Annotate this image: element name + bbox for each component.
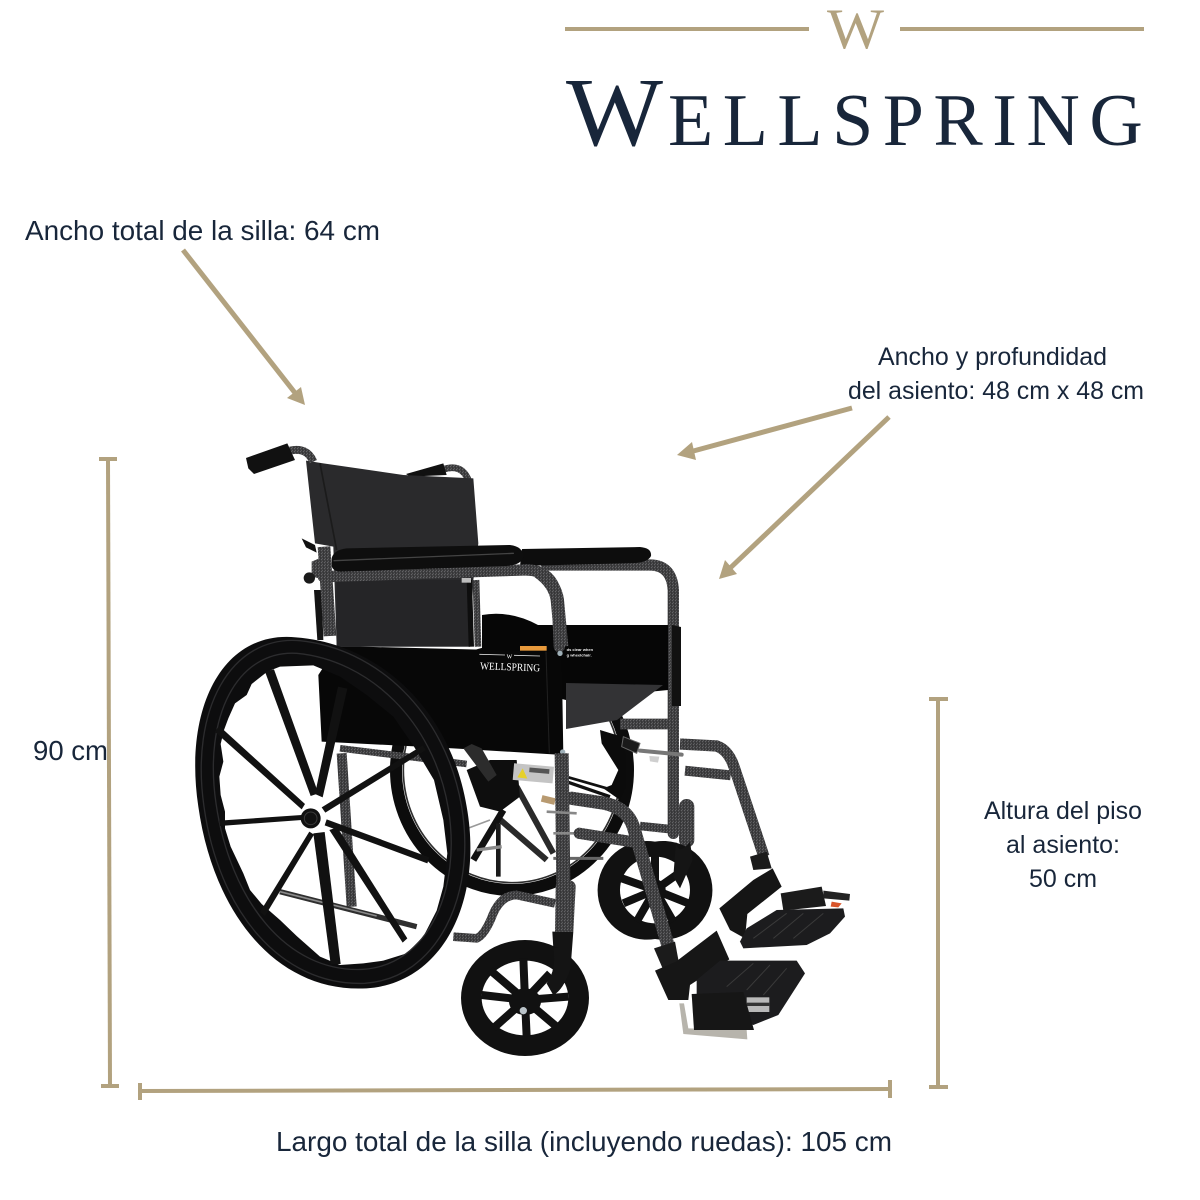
dimension bar: altura total: [99, 459, 119, 1086]
arrow: profundidad del asiento: [719, 417, 889, 579]
arrow: ancho del asiento: [677, 408, 852, 460]
logo: wordmark: [566, 59, 1152, 167]
rear wheel spokes: [215, 669, 429, 964]
warning text: [567, 647, 594, 658]
label: altura del piso: al asiento:: [1006, 831, 1120, 859]
logo: wordmark: ELLSPRING: [668, 80, 1152, 162]
label: altura del piso: [984, 797, 1142, 893]
near back post and armrest: [302, 538, 559, 647]
far footrest: [680, 744, 850, 948]
panel logo rules: [479, 654, 540, 656]
seat: [566, 683, 663, 729]
far side frame: [547, 565, 687, 840]
near footrest: [654, 931, 805, 1039]
backrest: [306, 461, 478, 647]
far caster wheel: [598, 841, 712, 940]
label: asiento: Ancho y profundidad: [878, 343, 1107, 371]
logo: Wellspring: [565, 0, 1152, 167]
label: largo total: Largo total de la silla (incluyendo ruedas): 105 cm: [276, 1126, 892, 1157]
rear wheel hub: [301, 808, 321, 828]
logo: rule right: [900, 27, 1144, 31]
label: asiento: del asiento: 48 cm x 48 cm: [848, 377, 1144, 405]
dimension bar: largo total: [140, 1080, 890, 1100]
panel logo monogram: W: [507, 654, 513, 660]
far push handle: [406, 463, 468, 480]
rear wheel rim highlights: [201, 640, 465, 983]
rear wheel ring: [195, 637, 470, 989]
logo: wordmark: W: [566, 59, 664, 167]
logo: rule left: [565, 27, 809, 31]
brake lever and warning cylinder: [463, 744, 554, 783]
far armrest: [520, 547, 651, 566]
near rear wheel: [195, 637, 470, 989]
label: altura del piso: Altura del piso: [984, 797, 1142, 825]
near side panel with brand: [318, 646, 594, 755]
warning text: ds clear when: [567, 647, 594, 652]
warning text: g wheelchair.: [567, 653, 592, 658]
near legrest tubes: [572, 798, 668, 947]
panel logo wordmark: WELLSPRING: [480, 661, 540, 674]
label: altura del piso: 50 cm: [1029, 865, 1097, 893]
label: 90 cm: 90 cm: [33, 735, 108, 766]
label: ancho total: Ancho total de la silla: 64 cm: [25, 215, 380, 246]
near push handle: [246, 443, 313, 474]
under-seat frame and cross braces: [280, 748, 610, 938]
near front post and legrest: [538, 572, 577, 883]
dimension bar: altura del asiento: [929, 699, 948, 1087]
far side panel: [482, 614, 681, 706]
warning sticker on far panel: [520, 646, 547, 651]
near caster barrel and fork: [547, 880, 576, 995]
far rear wheel: [396, 650, 628, 890]
arrow: ancho total: [183, 250, 305, 405]
wheelchair illustration: [195, 443, 850, 1056]
near caster wheel: [461, 940, 589, 1056]
label: asiento: [848, 343, 1144, 405]
